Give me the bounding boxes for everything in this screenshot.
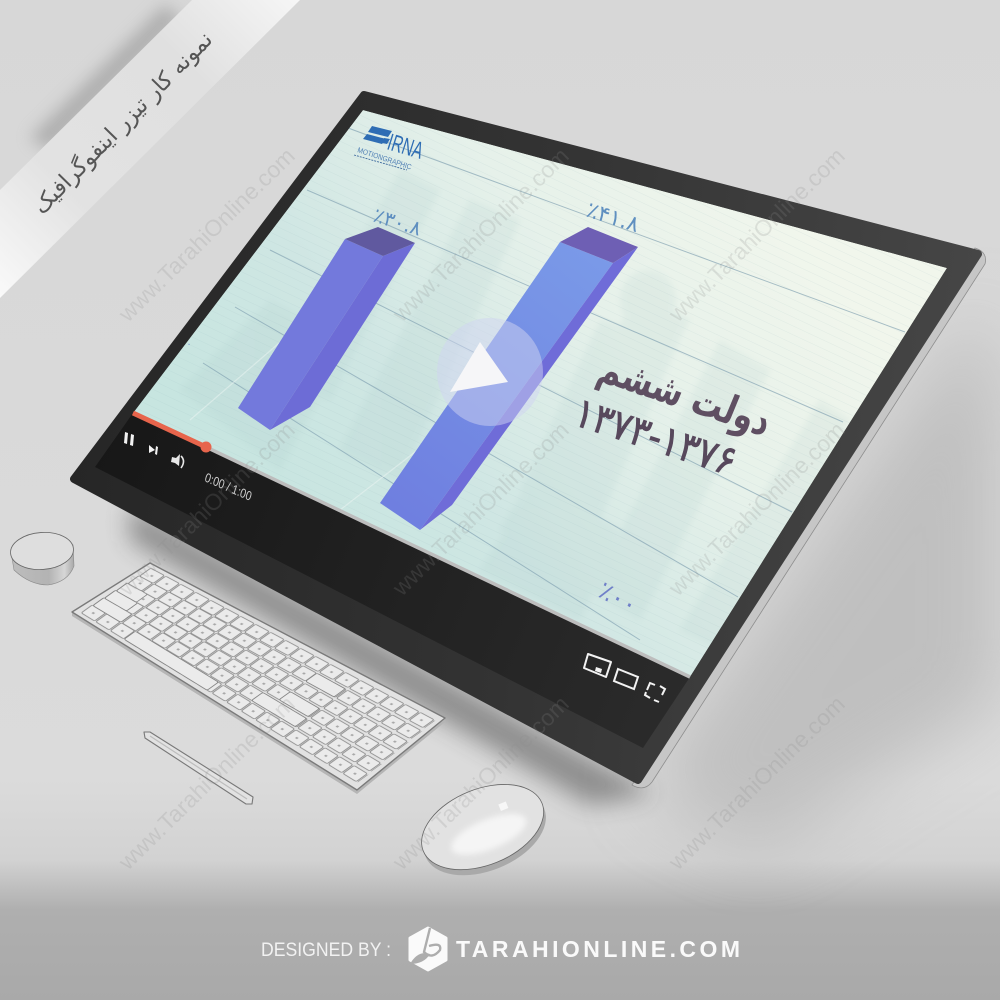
left shift [93,598,132,622]
motiongraphic caption: MOTIONGRAPHIC [356,145,413,172]
key row: shift row [92,597,383,772]
icon: hexagon logo [410,928,446,970]
watermarks [113,143,850,875]
key row: caps row [103,589,396,761]
value label: ٪۴۱.۸ [583,198,642,238]
mouse [409,768,558,892]
watermarks: www.TarahiOnline.com [113,143,300,327]
title: sixth government [568,344,779,486]
icon: picture in picture [584,654,611,677]
video screen [133,110,947,677]
brand name: TARAHIONLINE.COM [456,936,740,962]
player controls [124,413,690,702]
watermarks: www.TarahiOnline.com [387,691,574,875]
progress played [133,413,206,447]
watermarks: www.TarahiOnline.com [387,143,574,327]
key row: space row [80,604,369,783]
backspace [306,673,345,697]
designed by label: DESIGNED BY : [261,939,391,961]
icon: theatre mode [614,669,638,689]
chart grid lines [203,128,905,640]
bar chart [185,198,642,620]
keyboard [72,563,445,794]
monitor bezel [74,95,978,780]
progress handle [200,442,212,452]
silver outer rim [632,248,986,788]
faint skyline and crowd photo [396,178,846,600]
stray zero label on the left axis: ۰ [185,339,193,350]
player control bar background [95,413,690,748]
value label: ٪۳۰.۸ [370,204,425,241]
watermarks: www.TarahiOnline.com [113,417,300,601]
bar: 30.8 percent [238,204,425,430]
progress track [206,447,690,677]
icon: fullscreen [645,683,665,702]
white axis lines [190,342,416,510]
fine horizontal rules [176,114,944,668]
ribbon caption: نمونه کار تیزر اینفوگرافیک [27,26,218,220]
title: sixth government: دولت ششم [592,344,779,446]
watermarks: www.TarahiOnline.com [663,143,850,327]
watermarks: www.TarahiOnline.com [663,691,850,875]
monitor drop shadow on desk [130,300,1000,850]
key row: number row [127,575,423,740]
tab [116,583,148,602]
watermarks: www.TarahiOnline.com [387,417,574,601]
watermarks: www.TarahiOnline.com [663,417,850,601]
icon: next [149,445,158,455]
logo: IRNA motiongraphic [354,126,427,172]
stylus pen [144,732,253,804]
time readout: 0:00 / 1:00 [203,470,254,504]
IRNA wordmark: IRNA [384,128,427,164]
icon: pause [124,432,134,446]
bar: 41.8 percent [380,198,642,530]
play button [437,318,543,426]
watermarks: www.TarahiOnline.com [113,691,300,875]
caps lock [105,590,138,611]
surface dial [9,530,75,585]
footer credit [261,928,740,970]
years 1373-1376: ۱۳۷۳-۱۳۷۶ [568,389,743,486]
space bar [124,631,218,690]
logo flag mark [363,126,392,144]
key row: function row [138,567,436,729]
baseline label: 0 percent: ٪۰۰ [595,575,642,620]
enter [279,692,319,717]
corner ribbon [0,0,300,298]
right shift [252,692,307,727]
key row: tab row [115,582,409,751]
icon: volume [171,454,184,468]
